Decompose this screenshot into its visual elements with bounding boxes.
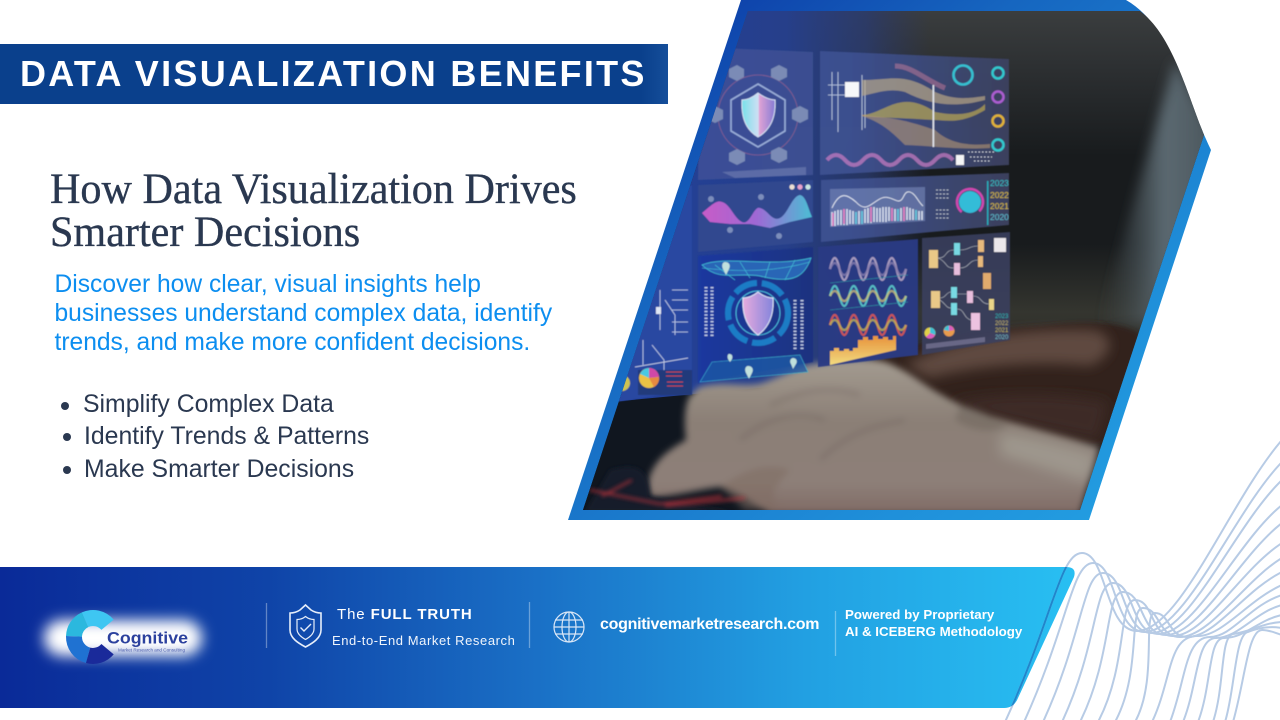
header banner bbox=[0, 44, 668, 104]
blurred background bbox=[570, 0, 1230, 520]
main heading: How Data Visualization Drives bbox=[50, 166, 577, 213]
dashboard panel: shield hexagon bbox=[698, 47, 813, 180]
small year labels bbox=[995, 314, 1009, 341]
decorative wave line pattern bbox=[1004, 441, 1280, 720]
intro paragraph: trends, and make more confident decisions. bbox=[54, 329, 530, 356]
intro paragraph: Discover how clear, visual insights help bbox=[54, 271, 481, 298]
photo image area bbox=[570, 0, 1230, 520]
logo: Cognitive bbox=[66, 610, 188, 664]
divider lines bbox=[266, 602, 836, 656]
tagline: full truth: The FULL TRUTH bbox=[337, 606, 473, 623]
year labels bbox=[990, 178, 1009, 222]
dashboard panel: bar and line chart bbox=[821, 173, 1009, 242]
bullet: trends: Identify Trends & Patterns bbox=[84, 423, 369, 450]
intro paragraph: businesses understand complex data, identify bbox=[54, 300, 552, 327]
year labels: 2022 bbox=[990, 190, 1009, 200]
logo wordmark: Cognitive bbox=[107, 628, 188, 648]
bullet: decisions: Make Smarter Decisions bbox=[84, 456, 354, 483]
dashboard overlay bbox=[614, 47, 1010, 402]
methodology note: AI & ICEBERG Methodology bbox=[845, 624, 1022, 639]
hand: foreground bbox=[648, 359, 1099, 514]
bullet list bbox=[61, 391, 369, 483]
main heading: Smarter Decisions bbox=[50, 209, 360, 256]
dashboard panel: node flow bbox=[922, 232, 1010, 355]
hand: background right hand bbox=[850, 323, 1140, 445]
dashboard panel: sankey flows bbox=[820, 51, 1009, 175]
small year labels: 2023 bbox=[995, 314, 1009, 320]
year labels: 2020 bbox=[990, 212, 1009, 222]
photo frame bbox=[568, 0, 1211, 520]
logo tagline: Market Research and Consulting bbox=[118, 648, 186, 652]
small year labels: 2020 bbox=[995, 335, 1009, 341]
website address: cognitivemarketresearch.com bbox=[600, 616, 819, 633]
banner title: DATA VISUALIZATION BENEFITS bbox=[20, 53, 647, 94]
icon: globe bbox=[554, 612, 584, 642]
photo panel: hands and holographic dashboards bbox=[568, 0, 1211, 520]
small year labels: 2022 bbox=[995, 321, 1009, 327]
dashboard panel: magenta wave chart bbox=[698, 180, 813, 252]
small year labels: 2021 bbox=[995, 328, 1009, 334]
methodology note bbox=[845, 607, 1022, 639]
dashboard panel: shield with grids bbox=[698, 247, 813, 383]
dashboard panel: circuit and pie chart bbox=[614, 185, 692, 402]
year labels: 2023 bbox=[990, 178, 1009, 188]
keyboard with red backlight bbox=[585, 467, 745, 512]
year labels: 2021 bbox=[990, 201, 1009, 211]
main heading bbox=[50, 166, 577, 256]
tagline: end to end: End-to-End Market Research bbox=[332, 633, 515, 648]
dashboard panel: sine wave charts bbox=[818, 239, 918, 367]
methodology note: Powered by Proprietary bbox=[845, 607, 994, 622]
bullet: simplify: Simplify Complex Data bbox=[83, 391, 334, 418]
intro paragraph bbox=[54, 271, 552, 356]
icon: shield bbox=[290, 605, 321, 647]
